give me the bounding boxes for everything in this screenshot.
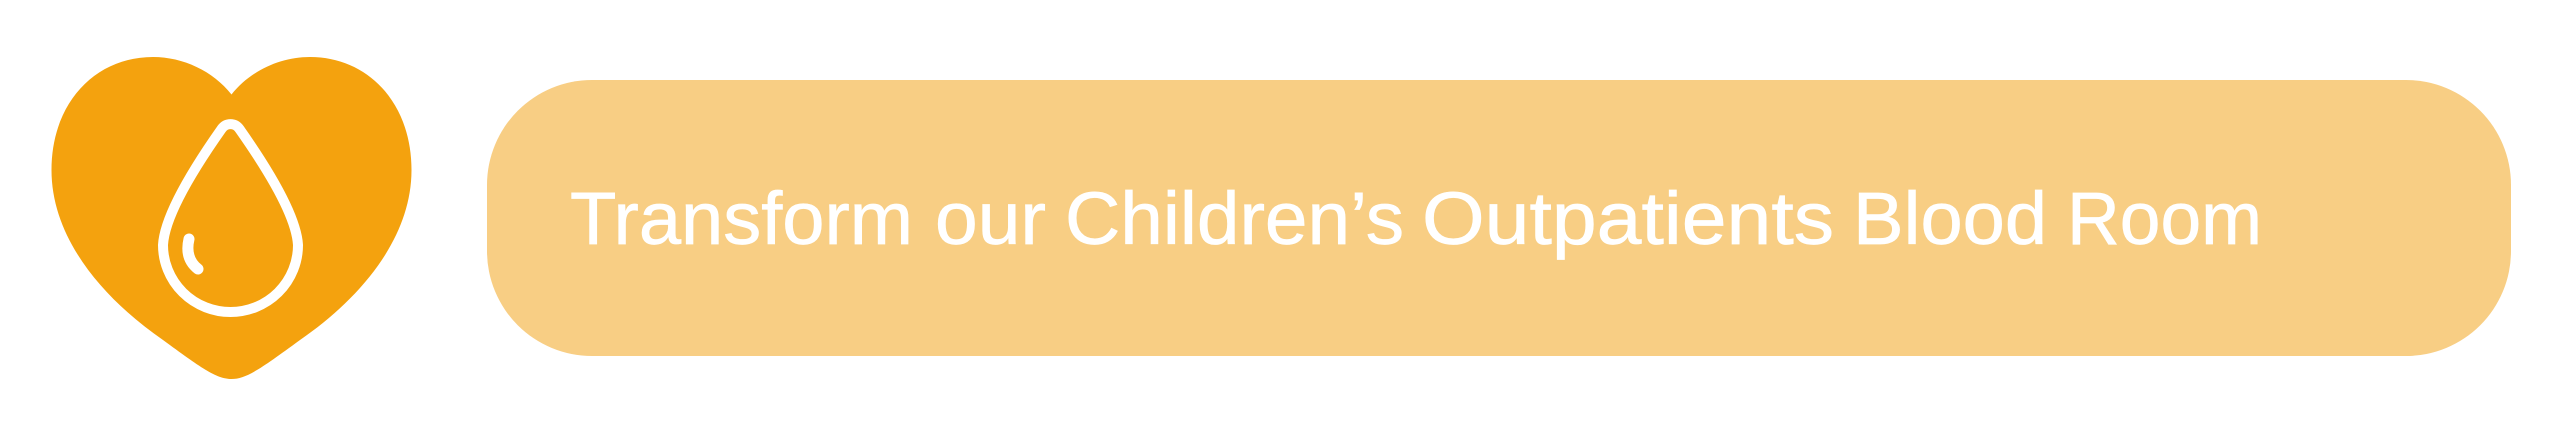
title text: Outpatients xyxy=(1422,177,1834,260)
title text: Transform xyxy=(570,177,913,260)
icon: heart with blood drop xyxy=(52,57,412,379)
title text: Room xyxy=(2067,177,2262,260)
title text: Children’s xyxy=(1065,177,1404,260)
title text: our xyxy=(935,177,1046,260)
drop highlight xyxy=(188,239,198,269)
blood drop outline xyxy=(163,124,298,312)
title text xyxy=(570,177,2262,260)
heart shape xyxy=(52,57,412,379)
title text: Blood xyxy=(1853,177,2047,260)
panel: title banner xyxy=(487,80,2511,356)
